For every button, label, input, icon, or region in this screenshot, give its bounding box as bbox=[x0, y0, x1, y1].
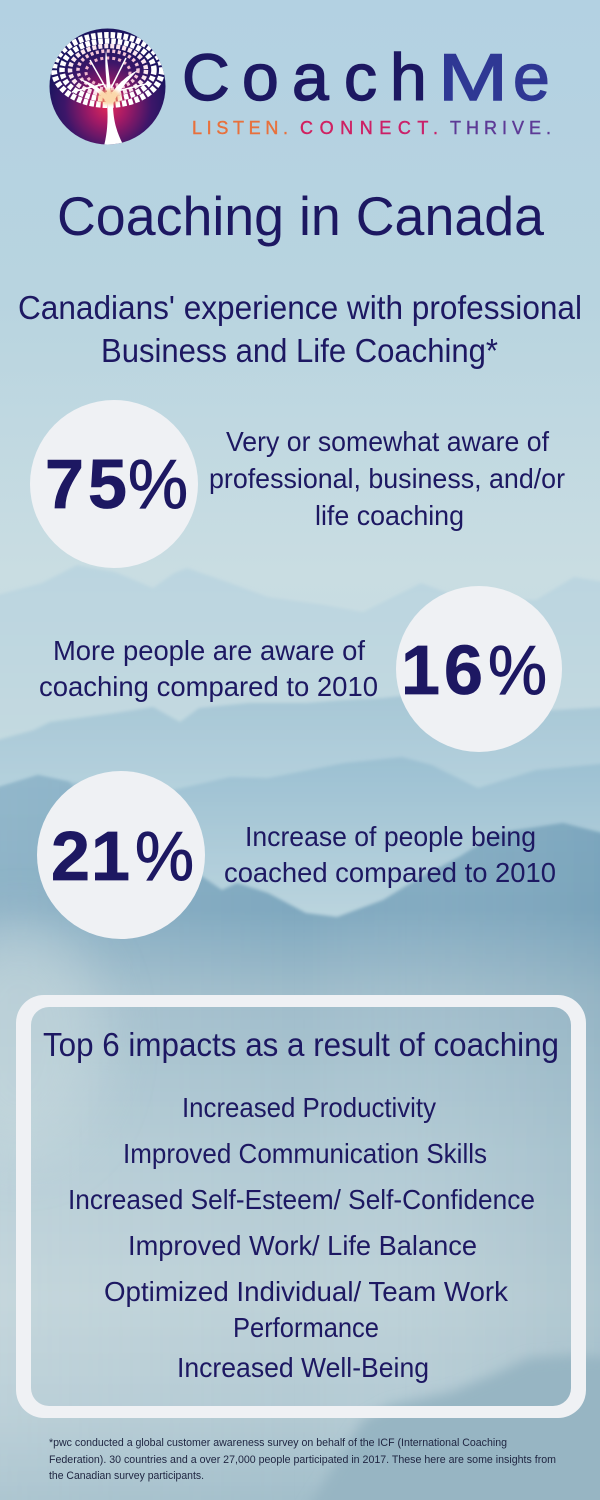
number: 21 bbox=[51, 817, 130, 895]
subtitle: Canadians' experience with professional bbox=[18, 289, 582, 326]
impacts list: Improved Communication Skills bbox=[123, 1138, 487, 1169]
circle bbox=[30, 400, 198, 568]
impacts list: Increased Productivity bbox=[182, 1092, 436, 1123]
logo bbox=[49, 28, 551, 146]
number bbox=[51, 817, 194, 895]
tagline: connect: CONNECT. bbox=[300, 118, 438, 138]
wordmark: M: M bbox=[438, 40, 508, 114]
footnote: *pwc conducted a global customer awareness survey on behalf of the ICF (International Coaching bbox=[49, 1437, 507, 1449]
wordmark: e: e bbox=[513, 40, 550, 114]
wordmark: Coach: Coach bbox=[182, 40, 427, 114]
description bbox=[224, 821, 556, 888]
description: Very or somewhat aware of bbox=[226, 426, 549, 457]
impacts list: Improved Work/ Life Balance bbox=[128, 1230, 477, 1261]
panel heading: Top 6 impacts as a result of coaching bbox=[43, 1026, 559, 1063]
tagline: thrive: THRIVE. bbox=[450, 118, 551, 138]
description: coached compared to 2010 bbox=[224, 857, 556, 888]
description bbox=[39, 635, 378, 702]
impacts list: Increased Self-Esteem/ Self-Confidence bbox=[68, 1184, 535, 1215]
impacts list: Optimized Individual/ Team Work bbox=[104, 1276, 509, 1307]
stat: 21% bbox=[37, 771, 556, 939]
circle bbox=[37, 771, 205, 939]
impacts list: Performance bbox=[233, 1312, 379, 1343]
description bbox=[209, 426, 565, 531]
number: % bbox=[488, 631, 547, 709]
number: % bbox=[135, 817, 194, 895]
description: coaching compared to 2010 bbox=[39, 671, 378, 702]
impacts list bbox=[68, 1092, 535, 1383]
description: life coaching bbox=[315, 500, 464, 531]
number: 75 bbox=[45, 445, 127, 523]
circle bbox=[396, 586, 562, 752]
panel border bbox=[16, 995, 586, 1418]
title: Coaching in Canada bbox=[57, 185, 544, 247]
footnote: Federation). 30 countries and a over 27,000 people participated in 2017. These here are some insights from bbox=[49, 1454, 556, 1466]
tagline: listen: LISTEN. bbox=[192, 118, 288, 138]
number bbox=[45, 445, 188, 523]
subtitle bbox=[18, 289, 582, 369]
number: % bbox=[128, 445, 188, 523]
description: professional, business, and/or bbox=[209, 463, 565, 494]
stat: 16% bbox=[39, 586, 562, 752]
footnote: the Canadian survey participants. bbox=[49, 1470, 204, 1482]
icon: tree in circle bbox=[49, 28, 167, 146]
panel: top 6 impacts bbox=[16, 995, 586, 1418]
stat: 75% bbox=[30, 400, 565, 568]
footnote bbox=[49, 1437, 556, 1482]
description: Increase of people being bbox=[245, 821, 536, 852]
number: 16 bbox=[401, 631, 483, 709]
subtitle: Business and Life Coaching* bbox=[101, 332, 498, 369]
number bbox=[401, 631, 547, 709]
description: More people are aware of bbox=[53, 635, 365, 666]
impacts list: Increased Well-Being bbox=[177, 1352, 429, 1383]
